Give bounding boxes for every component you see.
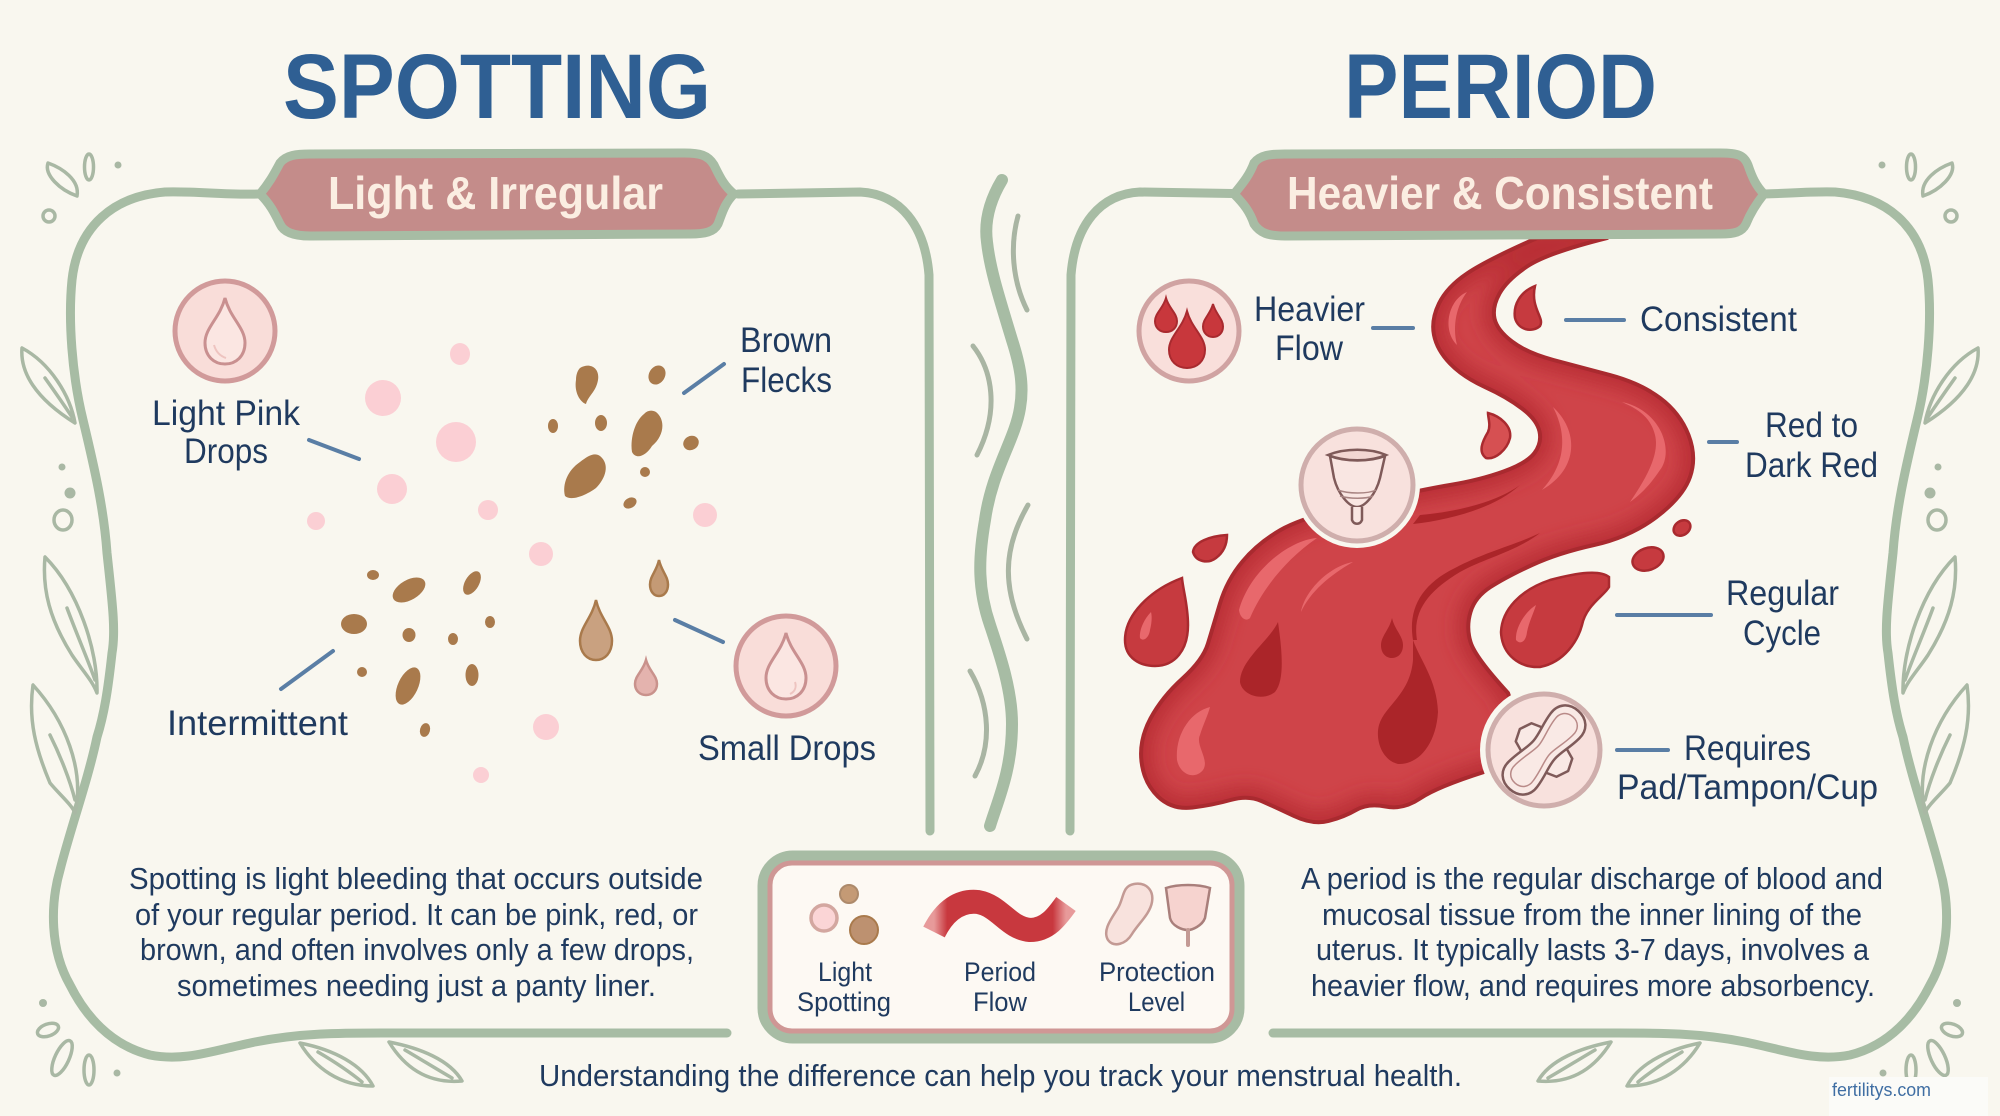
label: Requires Pad/Tampon/Cup <box>1617 729 1878 807</box>
badge: Light & Irregular <box>260 153 734 236</box>
label: Regular Cycle: Cycle <box>1743 614 1821 653</box>
title: SPOTTING: SPOTTING <box>283 36 711 138</box>
label: Regular Cycle: Regular <box>1726 574 1839 613</box>
connector: heavier flow <box>1373 326 1413 330</box>
label: Heavier Flow: Flow <box>1275 329 1344 368</box>
pink dots <box>307 343 717 783</box>
legend icon: pad and cup <box>1106 884 1210 945</box>
footer note: Understanding the difference can help you track your menstrual health. <box>539 1058 1462 1093</box>
paragraph: spotting definition: brown, and often involves only a few drops, <box>140 932 694 967</box>
legend text: protection level <box>1099 957 1215 1017</box>
legend text: period flow: Period <box>964 957 1036 987</box>
label: Heavier Flow <box>1254 290 1365 368</box>
legend text: period flow: Flow <box>973 987 1027 1017</box>
inner dark shapes <box>1240 485 1540 764</box>
label: Brown Flecks: Flecks <box>741 361 832 400</box>
connector: intermittent <box>281 651 333 689</box>
legend text: light spotting: Light <box>818 957 872 987</box>
label: Red to Dark Red: Dark Red <box>1745 446 1878 485</box>
badge: Light & Irregular: Light & Irregular <box>328 167 663 219</box>
badge: Heavier & Consistent: Heavier & Consistent <box>1287 167 1713 219</box>
paragraph: spotting definition: of your regular period. It can be pink, red, or <box>135 897 698 932</box>
connector: red to dark red <box>1709 440 1737 444</box>
paragraph: spotting definition <box>129 861 703 1003</box>
illustration: blood flow <box>1125 238 1693 822</box>
legend box <box>763 856 1239 1038</box>
paragraph: spotting definition: Spotting is light bleeding that occurs outside <box>129 861 703 896</box>
watermark <box>1829 1077 1988 1116</box>
label: Light Pink Drops: Light Pink <box>152 394 300 433</box>
label: Brown Flecks: Brown <box>740 321 832 360</box>
paragraph: period definition: A period is the regular discharge of blood and <box>1301 861 1883 896</box>
icon: light pink drop <box>175 281 275 381</box>
title: PERIOD: PERIOD <box>1344 36 1657 138</box>
label: Heavier Flow: Heavier <box>1254 290 1365 329</box>
decorative foliage: left <box>22 154 462 1086</box>
legend text: protection level: Protection <box>1099 957 1215 987</box>
paragraph: period definition <box>1301 861 1883 1003</box>
divider: wavy centre line <box>970 180 1028 826</box>
legend text: light spotting: Spotting <box>797 987 891 1017</box>
watermark: fertilitys.com <box>1832 1080 1931 1100</box>
connector: small drops <box>675 620 723 642</box>
connector: consistent <box>1566 318 1624 322</box>
outer droplets <box>1125 286 1693 667</box>
icon: heavier flow drops <box>1139 281 1239 381</box>
label: Requires Pad/Tampon/Cup: Pad/Tampon/Cup <box>1617 768 1878 807</box>
icon: sanitary pad <box>1480 686 1608 814</box>
panel frame: spotting <box>53 192 930 1057</box>
label: Brown Flecks <box>740 321 832 400</box>
label: Light Pink Drops <box>152 394 300 471</box>
label: Intermittent: Intermittent <box>167 704 348 743</box>
label: Regular Cycle <box>1726 574 1839 653</box>
connector: light pink drops <box>309 440 359 459</box>
icon: menstrual cup <box>1294 422 1420 548</box>
decorative foliage: right <box>1538 154 1978 1086</box>
label: Requires Pad/Tampon/Cup: Requires <box>1684 729 1811 768</box>
connector: brown flecks <box>684 364 724 393</box>
tan drops <box>580 560 668 695</box>
label: Red to Dark Red <box>1745 406 1878 485</box>
label: Red to Dark Red: Red to <box>1765 406 1858 445</box>
label: Small Drops: Small Drops <box>698 729 876 768</box>
connector: requires protection <box>1617 748 1668 752</box>
badge: Heavier & Consistent <box>1234 153 1764 236</box>
paragraph: period definition: uterus. It typically lasts 3-7 days, involves a <box>1316 932 1870 967</box>
legend icon: light spotting <box>811 885 878 944</box>
legend text: period flow <box>964 957 1036 1017</box>
paragraph: period definition: heavier flow, and requires more absorbency. <box>1311 968 1875 1003</box>
legend text: protection level: Level <box>1128 987 1185 1017</box>
brown flecks <box>341 362 701 738</box>
icon: small drop <box>736 616 836 716</box>
label: Light Pink Drops: Drops <box>184 432 268 471</box>
legend icon: period flow <box>934 902 1066 932</box>
connector: regular cycle <box>1617 613 1711 617</box>
flow highlights <box>1177 292 1666 775</box>
panel frame: period <box>1070 192 1947 1057</box>
paragraph: period definition: mucosal tissue from the inner lining of the <box>1322 897 1862 932</box>
label: Consistent: Consistent <box>1640 300 1797 339</box>
paragraph: spotting definition: sometimes needing just a panty liner. <box>177 968 656 1003</box>
legend text: light spotting <box>797 957 891 1017</box>
